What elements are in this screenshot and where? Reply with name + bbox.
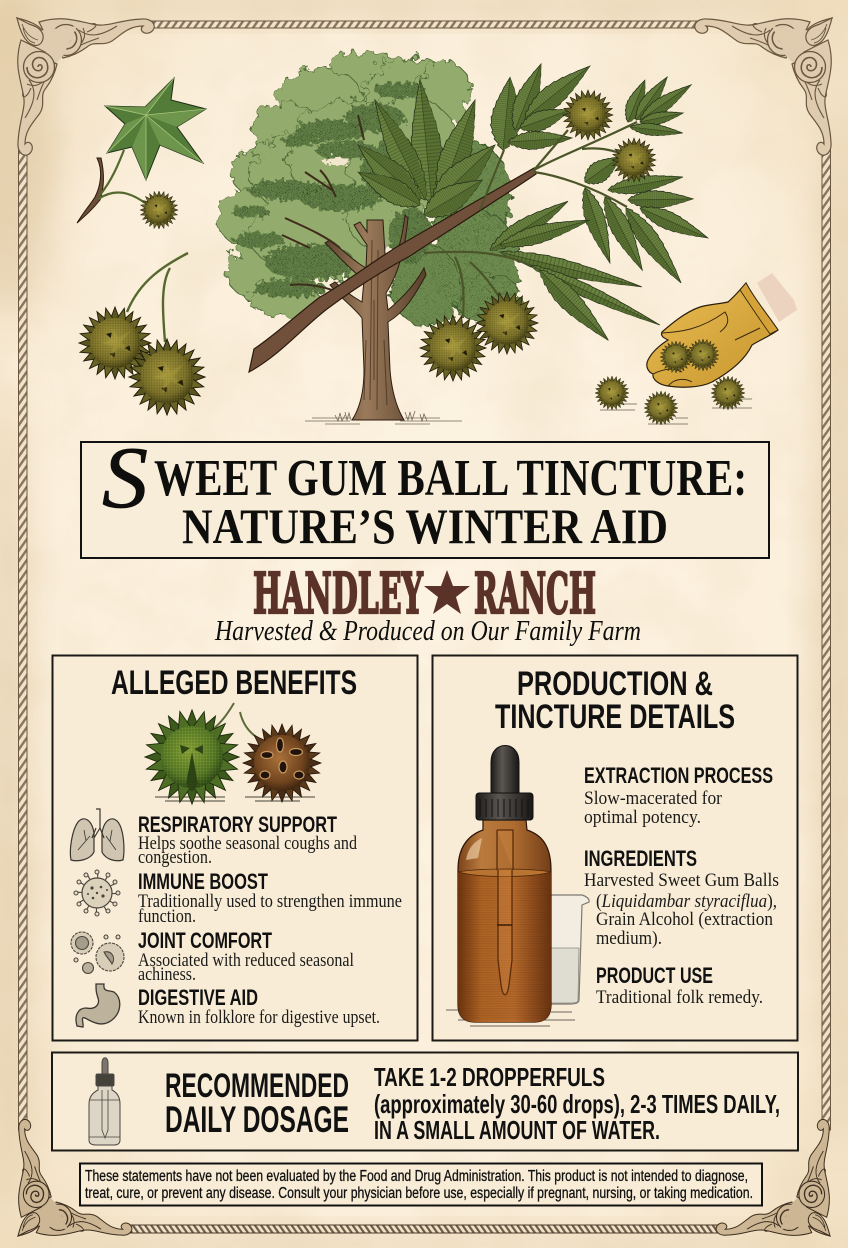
corner ornament: bottom right [716,1119,830,1236]
panel: production and tincture details [432,656,798,1040]
tree trunk and limbs [282,115,426,420]
brand: Handley Ranch: RANCH [474,561,596,627]
title text: S [102,430,148,527]
benefit: immune boost [138,869,402,927]
grass [305,411,462,424]
icon: star [424,570,470,614]
tree foliage [217,52,522,325]
dosage heading: DAILY DOSAGE [165,1099,349,1140]
benefit: respiratory support: congestion. [138,848,212,868]
dosage heading [165,1067,349,1140]
icon: virus [74,870,120,916]
benefit: immune boost: function. [138,907,196,927]
illustration: gloved hand holding seed balls [647,273,797,387]
leafy branch: limb and stems [249,122,637,372]
illustration: sweet gum tree [217,52,711,424]
benefit: joint comfort: Associated with reduced seasonal [138,951,354,971]
detail: ingredients: Grain Alcohol (extraction [596,909,773,930]
dosage instructions: TAKE 1-2 DROPPERFULS [374,1062,605,1092]
detail: product use: Traditional folk remedy. [596,987,763,1008]
benefit: digestive aid [138,985,380,1028]
detail: ingredients [584,846,779,949]
illustration: fallen seed balls [591,372,752,429]
corner ornament: top right [695,18,832,155]
icon: cells [71,932,124,974]
corner ornament: top left [17,18,154,155]
panel: alleged benefits [52,656,418,1040]
illustration: pair of seed balls [71,253,214,424]
corner ornament: bottom left [18,1119,132,1236]
detail: ingredients: Harvested Sweet Gum Balls [584,870,779,891]
detail: product use: PRODUCT USE [596,963,713,988]
detail: ingredients: INGREDIENTS [584,846,697,871]
icon: lungs [70,809,124,861]
heading: alleged benefits: ALLEGED BENEFITS [111,664,357,702]
panel: recommended daily dosage [52,1052,798,1150]
detail: product use [596,963,763,1008]
benefit: joint comfort: achiness. [138,965,196,985]
illustration: amber dropper bottle [446,746,575,1026]
benefit: digestive aid: DIGESTIVE AID [138,985,258,1010]
illustration: maple-like leaf with twig and seed ball [77,78,206,233]
benefit: immune boost: Traditionally used to strengthen immune [138,892,402,912]
title text: NATURE’S WINTER AID [182,498,668,554]
heading: production and tincture details: TINCTURE DETAILS [495,698,735,736]
dosage instructions: IN A SMALL AMOUNT OF WATER. [374,1115,660,1145]
heading: production and tincture details: PRODUCTION & [517,665,713,703]
brand: Handley Ranch: HANDLEY [253,561,424,627]
disclaimer box [80,1164,762,1206]
detail: ingredients: medium). [596,928,662,949]
icon: small dropper bottle [89,1058,120,1145]
disclaimer text [85,1168,753,1202]
seed balls on branch [413,84,661,388]
tagline: Harvested & Produced on Our Family Farm [214,616,641,647]
benefit: respiratory support: Helps soothe seasonal coughs and [138,834,358,854]
detail: extraction process: Slow-macerated for [584,788,723,809]
icon: stomach [76,984,120,1027]
illustration: beaker [545,895,589,1004]
detail: extraction process [584,763,773,828]
detail: ingredients: (Liquidambar styraciflua), [596,891,777,912]
detail: extraction process: optimal potency. [584,807,701,828]
benefit: respiratory support: RESPIRATORY SUPPORT [138,812,337,837]
benefit: respiratory support [138,812,358,868]
benefit: immune boost: IMMUNE BOOST [138,869,268,894]
benefit: joint comfort: JOINT COMFORT [138,928,272,953]
benefit: joint comfort [138,928,354,985]
illustration: green and brown seed balls [134,699,330,815]
title box [81,430,769,558]
heading: production and tincture details [495,665,735,736]
dosage heading: RECOMMENDED [165,1067,349,1105]
dosage instructions [374,1062,780,1145]
detail: extraction process: EXTRACTION PROCESS [584,763,773,788]
leafy branch: leaves [349,57,711,348]
title text [102,430,747,554]
benefit: digestive aid: Known in folklore for digestive upset. [138,1008,380,1028]
